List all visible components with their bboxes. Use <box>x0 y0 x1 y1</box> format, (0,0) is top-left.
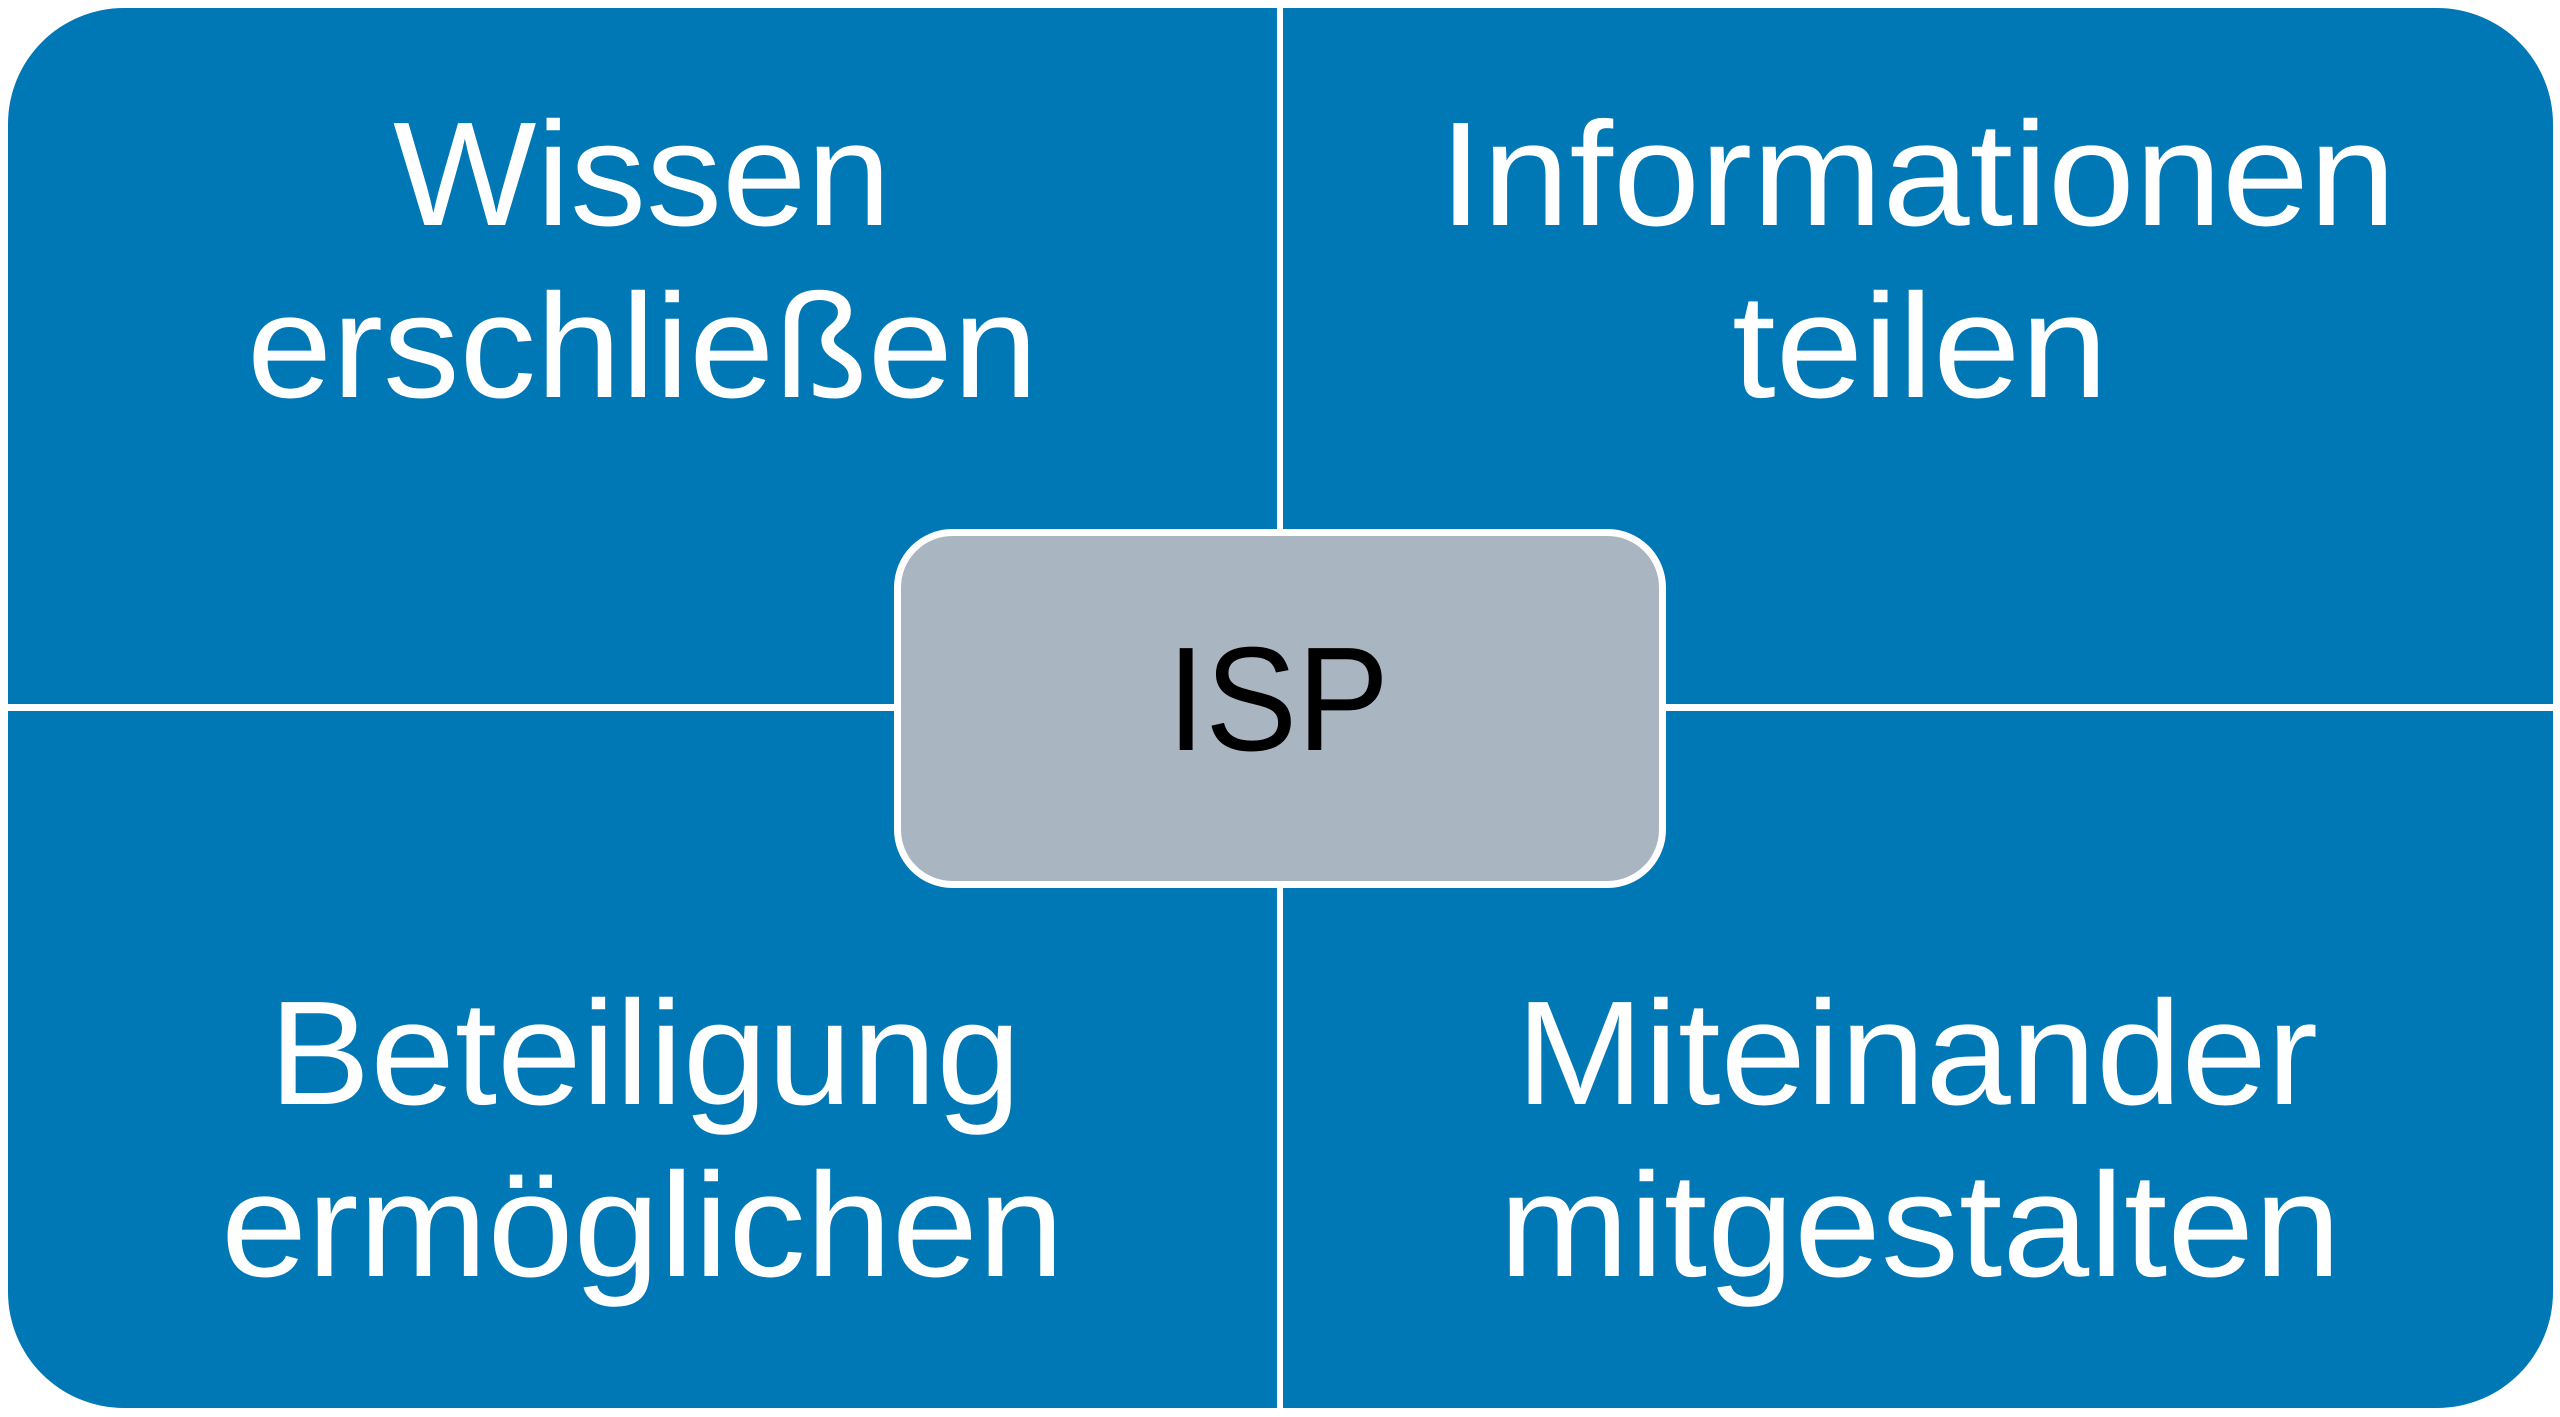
quadrant: Miteinander mitgestalten: Miteinander <box>1516 971 2318 1136</box>
center box: ISP <box>898 532 1662 884</box>
quadrant: Wissen erschließen: Wissen <box>393 92 891 257</box>
quadrant: Beteiligung ermöglichen: Beteiligung <box>269 971 1021 1136</box>
quadrant: Miteinander mitgestalten: mitgestalten <box>1499 1143 2341 1308</box>
quadrant: Informationen teilen <box>1439 92 2396 429</box>
center box: ISP: ISP <box>1167 617 1389 782</box>
quadrant: Wissen erschließen <box>247 92 1038 429</box>
quadrant: Informationen teilen: Informationen <box>1439 92 2396 257</box>
quadrant: Informationen teilen: teilen <box>1732 264 2108 429</box>
quadrant: Wissen erschließen: erschließen <box>247 264 1038 429</box>
quadrant: Miteinander mitgestalten <box>1499 971 2341 1308</box>
quadrant: Beteiligung ermöglichen <box>221 971 1064 1308</box>
quadrant: Beteiligung ermöglichen: ermöglichen <box>221 1143 1064 1308</box>
